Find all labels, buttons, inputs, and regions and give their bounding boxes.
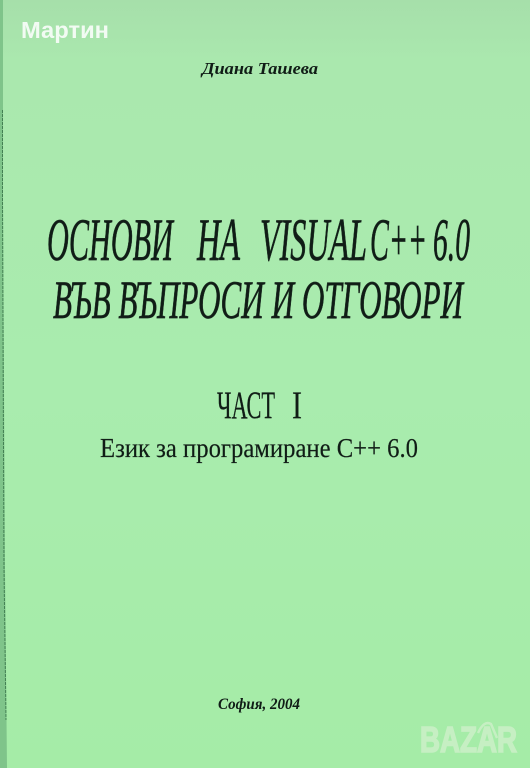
book cover: 6.0 <box>433 207 470 273</box>
left spine edge <box>0 0 7 768</box>
author: Диана Ташева <box>200 59 319 78</box>
part number: I <box>292 384 302 427</box>
subtitle: Език за програмиране C++ 6.0 <box>100 433 418 463</box>
title: ОСНОВИ <box>47 207 175 273</box>
part number: ЧАСТ <box>217 384 275 427</box>
title: VISUAL <box>260 207 367 273</box>
place and year: София, 2004 <box>218 696 300 713</box>
watermark: seller name: Мартин <box>21 17 109 43</box>
title <box>47 207 470 330</box>
title: НА <box>196 207 240 273</box>
title: C++ <box>370 207 427 273</box>
